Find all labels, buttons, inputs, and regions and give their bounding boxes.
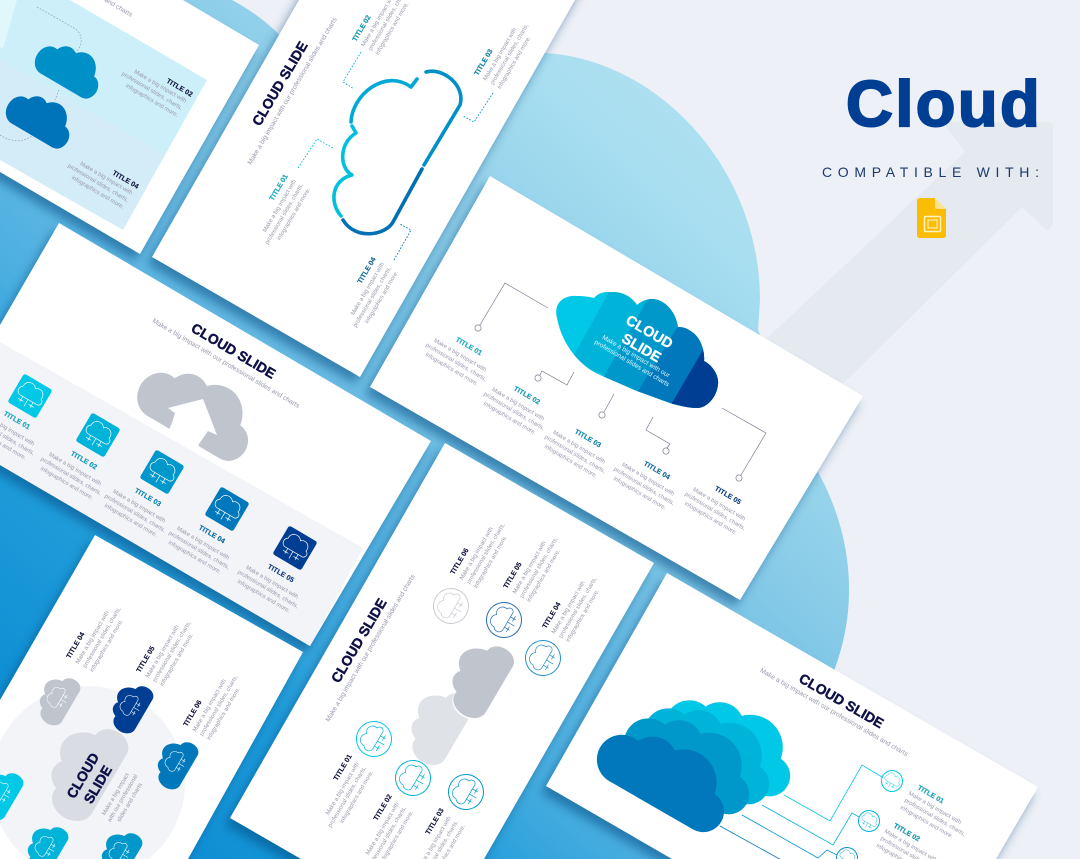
caption: title 02: TITLE 02 (69, 450, 98, 471)
caption: title 04: infographics and more. (565, 588, 601, 643)
caption: title 02: professional slides, charts, (482, 392, 545, 432)
caption: title 04: professional slides, charts, (353, 266, 393, 329)
arrow: faint background arrow (760, 122, 1053, 420)
caption: title 02: TITLE 02 (892, 823, 921, 843)
panel: top-left slide with two clouds (0, 0, 259, 254)
center heading line two: SLIDE (80, 763, 115, 806)
heading: CLOUD SLIDE (249, 39, 311, 128)
panel: layered cloud slide (546, 573, 1038, 859)
caption: title 03: TITLE 03 (133, 487, 162, 508)
caption: title 05: Make a big impact with (145, 624, 181, 679)
caption: title 05: infographics and more. (526, 548, 562, 603)
caption: title 04: infographics and more. (167, 540, 222, 576)
caption: title 01: infographics and more. (339, 770, 375, 825)
caption: title 06: Make a big impact with (192, 678, 228, 733)
caption: title 01: Make a big impact with (907, 791, 962, 826)
caption: title 02: professional slides, charts, (120, 71, 183, 112)
leader lines (475, 283, 766, 481)
caption: title 01 (248, 173, 312, 250)
caption: title 01: TITLE 01 (2, 410, 31, 431)
caption: title 02: TITLE 02 (352, 14, 373, 43)
icon tile 04 (204, 486, 250, 532)
caption: title 05: Make a big impact with (244, 565, 299, 600)
caption: title 01 (420, 325, 498, 390)
caption: title 05 (503, 526, 567, 603)
gray circle (0, 686, 185, 859)
caption: title 05: TITLE 05 (713, 485, 742, 506)
upload cloud (129, 349, 268, 468)
subtitle: Make a big impact with our professional slides and charts (247, 16, 339, 166)
small cloud: cyan (0, 763, 26, 824)
caption: title 03 (403, 807, 469, 859)
icon circle 05 (480, 596, 528, 644)
caption: title 01: infographics and more. (424, 352, 479, 388)
caption: title 02 (875, 820, 952, 859)
center subtitle: Make a big impact (101, 772, 131, 817)
icon circle 02 (389, 754, 437, 802)
caption: title 03 (474, 13, 537, 90)
caption: title 06: professional slides, charts, (199, 674, 240, 737)
caption: title 06 (450, 512, 514, 589)
caption: title 06: infographics and more. (473, 534, 509, 589)
caption: title 03: Make a big impact with (483, 27, 518, 82)
caption: title 01: TITLE 01 (333, 753, 354, 782)
caption: title 05: TITLE 05 (136, 645, 157, 674)
icon tile 02 (75, 412, 121, 458)
caption: title 02 (351, 793, 417, 859)
caption: title 05 (679, 474, 757, 539)
subtitle: compatible with: COMPATIBLE WITH: (822, 164, 1039, 180)
center heading: CLOUD (63, 750, 102, 801)
caption: title 04: TITLE 04 (642, 460, 671, 481)
icon: google slides (917, 198, 946, 238)
caption: title 05: professional slides, charts, (236, 570, 299, 610)
connector lines (720, 765, 882, 859)
caption: title 02 (352, 0, 415, 56)
caption: title 04 (336, 256, 400, 333)
caption: title 02: TITLE 02 (165, 78, 194, 99)
caption: title 05 (136, 610, 200, 687)
panel: outline cloud slide (152, 0, 575, 377)
caption: title 04: TITLE 04 (542, 601, 563, 630)
caption: title 06: professional slides, charts, (466, 522, 507, 585)
icon tile 01 (7, 373, 53, 419)
icon circle 06 (427, 582, 475, 630)
subtitle: Make a big impact with our professional slides and charts (759, 667, 909, 758)
heading: CLOUD SLIDE (796, 670, 887, 731)
caption: title 03: infographics and more. (543, 444, 598, 480)
caption: title 03: infographics and more. (497, 35, 533, 90)
striped cloud (556, 292, 718, 408)
upper band (0, 0, 207, 155)
caption: title 04: Make a big impact with (75, 610, 111, 665)
panel: circle of clouds slide (0, 535, 303, 859)
caption: title 04 (62, 148, 140, 212)
small cloud: blue (147, 732, 201, 793)
caption: title 04: Make a big impact with (551, 580, 587, 635)
subtitle: Make a big impact with our professional slides and charts (151, 318, 301, 410)
caption: title 04: infographics and more. (612, 476, 667, 512)
caption: title 01 (899, 782, 976, 845)
caption: title 02: infographics and more. (482, 401, 537, 437)
caption: title 02: Make a big impact with (365, 802, 401, 856)
caption: title 06: infographics and more. (206, 686, 242, 741)
caption: title 04: Make a big impact with (350, 262, 386, 316)
caption: title 04 (163, 513, 241, 578)
caption: title 03: TITLE 03 (573, 428, 602, 449)
dotted connectors (0, 7, 81, 141)
caption: title 04: infographics and more. (364, 270, 400, 325)
caption: title 01: professional slides, charts, (424, 343, 487, 383)
caption: title 03: TITLE 03 (474, 48, 495, 77)
caption: title 05: Make a big impact with (691, 487, 746, 522)
caption: title 03: Make a big impact with (551, 430, 606, 465)
caption: title 01 (311, 753, 377, 833)
caption: title 02: TITLE 02 (512, 385, 541, 406)
icon circle 02 (855, 807, 883, 835)
small cloud: gray (29, 668, 83, 729)
caption: title 05: infographics and more. (159, 632, 195, 687)
caption: title 01 (0, 399, 46, 464)
caption: title 04: Make a big impact with (175, 526, 230, 561)
outline cloud (334, 71, 461, 234)
dark cloud (434, 629, 520, 726)
caption: title 03: Make a big impact with (111, 489, 166, 524)
center subtitle: slides and charts (116, 782, 144, 823)
heading: CLOUD SLIDE (328, 596, 390, 685)
icon circle 01 (350, 715, 398, 763)
small cloud: navy (102, 676, 156, 737)
caption: title 06: Make a big impact with (459, 526, 495, 581)
caption: title 06: TITLE 06 (450, 547, 471, 576)
caption: title 05: infographics and more. (236, 579, 291, 615)
caption: title 04: professional slides, charts, (66, 163, 129, 204)
caption: title 04 (542, 566, 606, 643)
caption: title 01: professional slides, charts, (327, 765, 368, 829)
cloud: upper (30, 32, 111, 103)
dotted leaders (298, 52, 493, 260)
caption: title 01: TITLE 01 (454, 336, 483, 357)
caption: title 02: Make a big impact with (490, 387, 545, 422)
caption: title 05: TITLE 05 (266, 563, 295, 584)
caption: title 04: Make a big impact with (620, 462, 675, 497)
cloud: lower (1, 82, 82, 153)
caption: title 01: Make a big impact with (262, 179, 298, 233)
caption: title 05: infographics and more. (683, 501, 738, 537)
caption: title 03: infographics and more. (103, 503, 158, 539)
cloud subtitle: Make a big impact with our (601, 334, 672, 380)
icon circle 03 (833, 844, 861, 859)
caption: title 05: professional slides, charts, (152, 620, 193, 683)
icon tile 03 (139, 449, 185, 495)
caption: title 04: TITLE 04 (66, 631, 87, 660)
caption: title 01: Make a big impact with (432, 338, 487, 373)
caption: title 04: infographics and more. (89, 618, 125, 673)
caption: title 06: TITLE 06 (183, 699, 204, 728)
caption: title 01: TITLE 01 (269, 173, 290, 202)
caption: title 04 (608, 449, 686, 514)
center subtitle: with our professional (106, 774, 140, 824)
heading: CLOUD SLIDE (189, 320, 278, 382)
caption: title 02: TITLE 02 (373, 793, 394, 822)
caption: title 02: professional slides, charts, (39, 457, 102, 497)
caption: title 02 (35, 439, 113, 504)
panel: upload cloud slide (0, 223, 431, 646)
caption: title 01: infographics and more. (899, 805, 954, 840)
caption: title 03: TITLE 03 (425, 807, 446, 836)
caption: title 04: professional slides, charts, (612, 467, 675, 507)
cloud subtitle: professional slides and charts (593, 339, 671, 389)
panel: striped cloud slide (370, 176, 863, 600)
caption: title 03: professional slides, charts, (103, 494, 166, 534)
caption: title 03 (539, 417, 617, 482)
small cloud: teal (17, 817, 71, 859)
cloud heading: CLOUD (623, 313, 675, 353)
caption: title 05: professional slides, charts, (519, 536, 560, 599)
caption: title 02 (478, 374, 556, 439)
lightest band (0, 0, 17, 48)
caption: title 04: infographics and more. (70, 175, 125, 211)
caption: title 04: professional slides, charts, (167, 531, 230, 571)
center cloud (30, 711, 134, 829)
caption: title 04: professional slides, charts, (82, 606, 123, 669)
cloud heading line two: SLIDE (619, 331, 664, 366)
caption: title 04: TITLE 04 (357, 256, 378, 285)
caption: title 04: TITLE 04 (111, 170, 140, 191)
caption: title 02 (116, 56, 194, 120)
caption: title 03 (99, 476, 177, 541)
light cloud (395, 678, 478, 771)
background cloud (0, 0, 849, 859)
caption: title 04: professional slides, charts, (558, 576, 599, 639)
subtitle: Make a big impact with our professional slides and charts (325, 573, 417, 723)
caption: title 03: professional slides, charts, (543, 435, 606, 475)
caption: title 04 (66, 596, 130, 673)
panel: twin cloud slide (230, 443, 654, 859)
caption: title 04: Make a big impact with (79, 161, 133, 197)
icon circle 03 (442, 768, 490, 816)
icon tile 05 (272, 525, 318, 571)
lower band (0, 60, 165, 230)
caption: title 01: professional slides, charts, (265, 183, 305, 246)
layered clouds (588, 675, 811, 840)
caption: title 01: TITLE 01 (916, 785, 945, 805)
caption: title 04: TITLE 04 (197, 524, 226, 545)
caption: title 05: Make a big impact with (512, 540, 548, 595)
caption: title 02: infographics and more. (39, 466, 94, 502)
caption: title 06 (183, 664, 247, 741)
small cloud: mid blue (91, 823, 145, 859)
caption: title 02: infographics and more. (375, 1, 411, 56)
caption: title 03: professional slides, charts, (490, 23, 530, 86)
caption: title 02: infographics and more. (124, 83, 179, 119)
caption: title 01: infographics and more. (276, 187, 312, 242)
caption: title 05 (232, 552, 310, 617)
caption: title 01: professional slides, charts, (903, 798, 966, 838)
title: Cloud (846, 67, 1042, 140)
caption: title 01: Make a big impact with (325, 762, 361, 816)
icon circle 04 (519, 634, 567, 682)
caption: title 02: Make a big impact with (47, 452, 102, 487)
caption: title 02: Make a big impact with (133, 69, 187, 105)
gray band (0, 342, 363, 646)
caption: title 05: TITLE 05 (503, 561, 524, 590)
icon circle 01 (878, 767, 906, 795)
caption: title 05: professional slides, charts, (683, 492, 746, 532)
